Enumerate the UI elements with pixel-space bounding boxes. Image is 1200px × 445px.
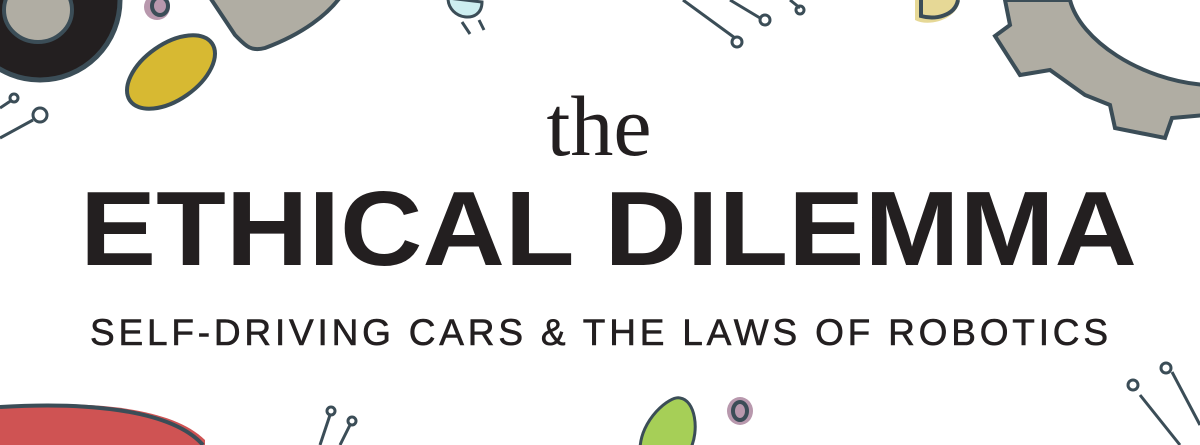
icon: yellow blob — [114, 20, 228, 124]
title: ETHICAL DILEMMA: ETHICAL DILEMMA — [80, 170, 1137, 288]
title: the: the — [546, 78, 652, 174]
icon: wires left — [0, 94, 47, 138]
icon: light blue drop — [448, 0, 484, 34]
icon: wires bottom-right — [1128, 363, 1200, 445]
icon: yellow shape top — [915, 0, 960, 23]
icon: gray block top — [205, 0, 345, 49]
icon: pink dot bottom — [727, 397, 753, 425]
icon: green blob — [640, 398, 695, 445]
icon: pink dot top — [144, 0, 170, 20]
icon: tire top-left — [0, 0, 120, 80]
icon: red shape bottom-left — [0, 404, 205, 445]
icon: wires bottom — [320, 407, 356, 445]
icon: gear right — [995, 0, 1200, 138]
icon: wires top center — [683, 0, 804, 47]
subtitle: SELF-DRIVING CARS & THE LAWS OF ROBOTICS — [90, 312, 1108, 353]
